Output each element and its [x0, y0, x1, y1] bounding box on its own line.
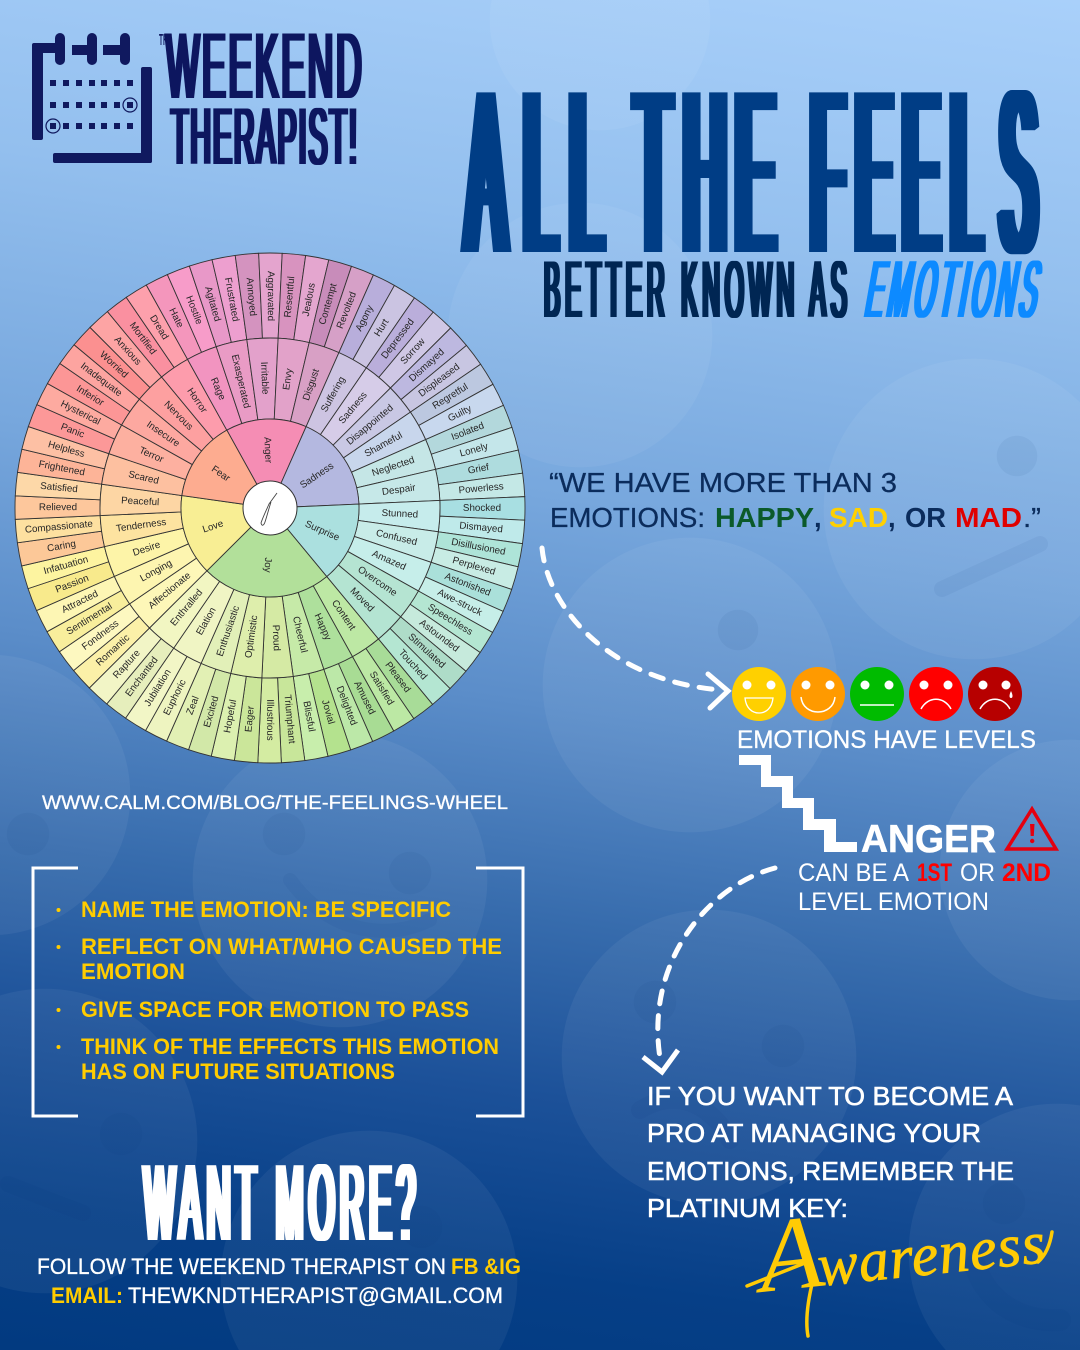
middle ring of feelings: Shameful — [363, 430, 404, 460]
outer ring of feelings: Worried — [97, 349, 130, 380]
middle ring of feelings: Disappointed — [345, 403, 396, 448]
middle ring of feelings: Overcome — [355, 564, 399, 599]
outer ring of feelings: Hate — [166, 306, 186, 330]
outer ring of feelings: Amused — [351, 679, 377, 716]
subtitle — [544, 244, 1052, 335]
text: platinum key: PLATINUM KEY: — [647, 1193, 848, 1223]
outer ring of feelings: Dread — [147, 313, 170, 342]
middle ring of feelings: Affectionate — [146, 570, 194, 612]
outer ring of feelings: Agitated — [202, 285, 223, 323]
contact text: FOLLOW THE WEEKEND THERAPIST ON — [37, 1254, 446, 1279]
quote: HAPPY — [715, 502, 814, 533]
quote: .” — [1023, 502, 1041, 533]
text: anger level note: 1ST — [917, 859, 952, 887]
outer ring of feelings: Dismayed — [459, 520, 503, 535]
contact text: FB &IG — [451, 1254, 521, 1279]
outer ring of feelings: Blissful — [300, 700, 317, 733]
outer ring of feelings: Relieved — [39, 502, 77, 513]
outer ring of feelings: Infatuation — [42, 554, 90, 577]
icon: calendar — [32, 33, 152, 163]
outer ring of feelings: Triumphant — [282, 694, 297, 744]
text: anger level note: CAN BE A — [798, 859, 909, 887]
outer ring of feelings: Depressed — [379, 317, 417, 361]
core emotions: Anger — [261, 437, 274, 464]
outer ring of feelings: Disillusioned — [450, 537, 506, 558]
outer ring of feelings: Aggravated — [265, 271, 276, 321]
outer ring of feelings: Shocked — [463, 503, 501, 514]
icon: staircase — [739, 755, 857, 852]
outer ring of feelings: Enchanted — [123, 655, 161, 699]
arrow: anger to awareness — [643, 868, 775, 1072]
outer ring of feelings: Astonished — [443, 571, 492, 599]
outer ring of feelings: Astounded — [417, 618, 461, 655]
quote: SAD — [829, 502, 888, 533]
middle ring of feelings: Disgust — [301, 367, 322, 402]
outer ring of feelings: Zeal — [185, 695, 202, 716]
icon: wheel centre with quill — [243, 481, 297, 535]
outer ring of feelings: Inadequate — [78, 361, 124, 399]
quote: , — [888, 502, 896, 533]
outer ring of feelings: Hurt — [372, 317, 392, 339]
outer ring of feelings: Inferior — [74, 383, 106, 409]
quote: EMOTIONS: — [550, 502, 705, 533]
outer ring of feelings: Agony — [354, 303, 376, 333]
middle ring of feelings: Amazed — [370, 548, 408, 573]
outer ring of feelings: Resentful — [282, 276, 297, 318]
core emotions: Surprise — [303, 519, 341, 544]
middle ring of feelings: Despair — [381, 482, 417, 498]
middle ring of feelings: Nervous — [161, 399, 195, 433]
middle ring of feelings: Elation — [194, 606, 219, 637]
tips list — [56, 897, 502, 1084]
outer ring of feelings: Fondness — [80, 618, 121, 653]
arrow: quote to emoji scale — [542, 548, 728, 708]
heading: anger: ANGER — [861, 818, 996, 861]
middle ring of feelings: Peaceful — [121, 495, 159, 508]
middle ring of feelings: Confused — [375, 528, 418, 548]
quote: “WE HAVE MORE THAN 3 — [549, 467, 897, 498]
outer ring of feelings: Contempt — [317, 282, 340, 326]
outer ring of feelings: Touched — [396, 647, 429, 682]
outer ring of feelings: Illustrious — [264, 699, 275, 741]
outer ring of feelings: Stimulated — [406, 631, 447, 671]
contact text — [37, 1254, 521, 1308]
outer ring of feelings: Displeased — [417, 362, 462, 399]
subtitle: BETTER KNOWN AS — [544, 244, 852, 335]
source url: WWW.CALM.COM/BLOG/THE-FEELINGS-WHEEL — [42, 793, 508, 814]
feelings wheel — [14, 252, 526, 764]
middle ring of feelings: Suffering — [319, 375, 348, 414]
outer ring of feelings: Helpless — [47, 439, 86, 460]
script word: awareness: Awareness — [746, 1168, 1050, 1316]
title — [466, 42, 1036, 302]
outer ring of feelings: Compassionate — [24, 519, 94, 536]
text: emotions have levels: EMOTIONS HAVE LEVELS — [737, 726, 1036, 754]
tips list: HAS ON FUTURE SITUATIONS — [81, 1059, 395, 1084]
middle ring of feelings: Optimistic — [243, 615, 260, 659]
outer ring of feelings: Revolted — [335, 290, 359, 330]
text: platinum key: IF YOU WANT TO BECOME A — [647, 1081, 1014, 1111]
outer ring of feelings: Passion — [54, 573, 90, 596]
middle ring of feelings: Sadness — [337, 390, 370, 426]
core emotions: Sadness — [298, 461, 336, 491]
middle ring of feelings: Scared — [127, 469, 160, 487]
outer ring of feelings: Hopeful — [222, 699, 239, 734]
tips list: REFLECT ON WHAT/WHO CAUSED THE — [81, 934, 502, 959]
quote: MAD — [955, 502, 1022, 533]
outer ring of feelings: Jovial — [319, 698, 336, 726]
outer ring of feelings — [14, 252, 526, 764]
outer ring of feelings: Delighted — [334, 685, 359, 727]
outer ring of feelings: Pleased — [382, 660, 413, 695]
outer ring of feelings: Guilty — [446, 403, 474, 424]
middle ring of feelings: Desire — [131, 539, 162, 559]
text: anger level note: LEVEL EMOTION — [798, 888, 989, 916]
outer ring of feelings: Jealous — [301, 282, 318, 317]
text: anger level note: OR — [960, 859, 995, 887]
outer ring of feelings: Lonely — [459, 441, 489, 460]
tips list: THINK OF THE EFFECTS THIS EMOTION — [81, 1034, 499, 1059]
middle ring of feelings: Content — [329, 598, 358, 633]
middle ring of feelings: Enthusiastic — [215, 604, 242, 658]
contact text: THEWKNDTHERAPIST@GMAIL.COM — [128, 1283, 503, 1308]
outer ring of feelings: Speechless — [426, 602, 475, 638]
outer ring of feelings: Awe-struck — [436, 587, 484, 619]
logo: The Weekend Therapist — [32, 15, 364, 181]
outer ring of feelings: Frightened — [38, 459, 86, 478]
text: platinum key: EMOTIONS, REMEMBER THE — [647, 1156, 1014, 1186]
outer ring of feelings: Perplexed — [451, 555, 497, 578]
icon: warning triangle — [1007, 809, 1056, 849]
logo: The Weekend Therapist: THE — [159, 32, 172, 49]
text: platinum key: PRO AT MANAGING YOUR — [647, 1118, 981, 1148]
icon: neutral face — [850, 667, 904, 721]
outer ring of feelings: Isolated — [450, 420, 486, 443]
middle ring of feelings: Moved — [348, 586, 376, 614]
outer ring of feelings: Caring — [46, 539, 77, 555]
emoji level scale — [732, 667, 1022, 721]
heading: want more: WANT MORE? — [144, 1142, 421, 1264]
icon: crying face — [968, 667, 1022, 721]
outer ring of feelings: Attracted — [60, 589, 100, 616]
outer ring of feelings: Jubilation — [142, 668, 174, 709]
icon: smiling face — [791, 667, 845, 721]
outer ring of feelings: Frustrated — [222, 277, 241, 322]
outer ring of feelings: Euphoric — [162, 678, 189, 717]
middle ring of feelings: Tenderness — [115, 517, 167, 535]
outer ring of feelings: Regretful — [431, 382, 470, 412]
outer ring of feelings: Hostile — [183, 294, 204, 327]
icon: laughing face — [732, 667, 786, 721]
middle ring of feelings: Neglected — [371, 455, 416, 479]
outer ring of feelings: Sentimental — [65, 601, 114, 638]
quote: , — [814, 502, 822, 533]
middle ring of feelings — [97, 335, 443, 681]
middle ring of feelings: Insecure — [144, 419, 182, 450]
logo: The Weekend Therapist: THERAPIST! — [171, 91, 359, 181]
middle ring of feelings: Enthralled — [168, 587, 205, 628]
bracket panel: tips — [33, 868, 523, 1116]
outer ring of feelings: Rapture — [111, 647, 143, 681]
quote — [549, 467, 1041, 533]
middle ring of feelings: Exasperated — [229, 353, 252, 409]
text: platinum key — [647, 1081, 1014, 1223]
middle ring of feelings: Rage — [208, 376, 228, 402]
middle ring of feelings: Envy — [281, 368, 295, 391]
outer ring of feelings: Romantic — [94, 632, 132, 669]
core emotions: Joy — [261, 557, 273, 573]
middle ring of feelings: Happy — [312, 612, 333, 642]
core emotions: Fear — [209, 464, 233, 485]
outer ring of feelings: Grief — [467, 462, 490, 477]
middle ring of feelings: Stunned — [381, 508, 418, 521]
icon: sad face — [909, 667, 963, 721]
logo: The Weekend Therapist: WEEKEND — [166, 15, 364, 119]
middle ring of feelings: Horror — [184, 386, 209, 416]
outer ring of feelings: Sorrow — [399, 336, 428, 367]
text: anger level note — [798, 859, 1051, 916]
tips list: GIVE SPACE FOR EMOTION TO PASS — [81, 997, 469, 1022]
tips list: NAME THE EMOTION: BE SPECIFIC — [81, 897, 451, 922]
middle ring of feelings: Irritable — [258, 362, 270, 395]
outer ring of feelings: Hysterical — [59, 399, 102, 428]
middle ring of feelings: Proud — [270, 625, 282, 651]
core emotions: Love — [201, 518, 225, 536]
contact text: EMAIL: — [51, 1283, 123, 1308]
title: FEELS — [811, 43, 1036, 302]
outer ring of feelings: Eager — [243, 705, 257, 733]
outer ring of feelings: Satisfied — [40, 481, 78, 495]
outer ring of feelings: Satisfied — [367, 670, 396, 707]
outer ring of feelings: Dismayed — [407, 347, 447, 384]
outer ring of feelings: Mortified — [127, 320, 158, 357]
outer ring of feelings: Anxious — [112, 334, 143, 368]
middle ring of feelings: Terror — [137, 445, 166, 466]
outer ring of feelings: Powerless — [458, 481, 504, 496]
outer ring of feelings: Annoyed — [244, 277, 258, 317]
quote: OR — [905, 502, 946, 533]
tips list: EMOTION — [81, 959, 185, 984]
title: ALL THE — [466, 42, 775, 301]
core emotions — [181, 419, 359, 597]
middle ring of feelings: Cheerful — [290, 615, 309, 654]
text: anger level note: 2ND — [1002, 859, 1051, 887]
subtitle: EMOTIONS — [860, 244, 1052, 334]
middle ring of feelings: Longing — [138, 558, 174, 584]
outer ring of feelings: Excited — [202, 695, 221, 729]
outer ring of feelings: Panic — [59, 421, 86, 441]
